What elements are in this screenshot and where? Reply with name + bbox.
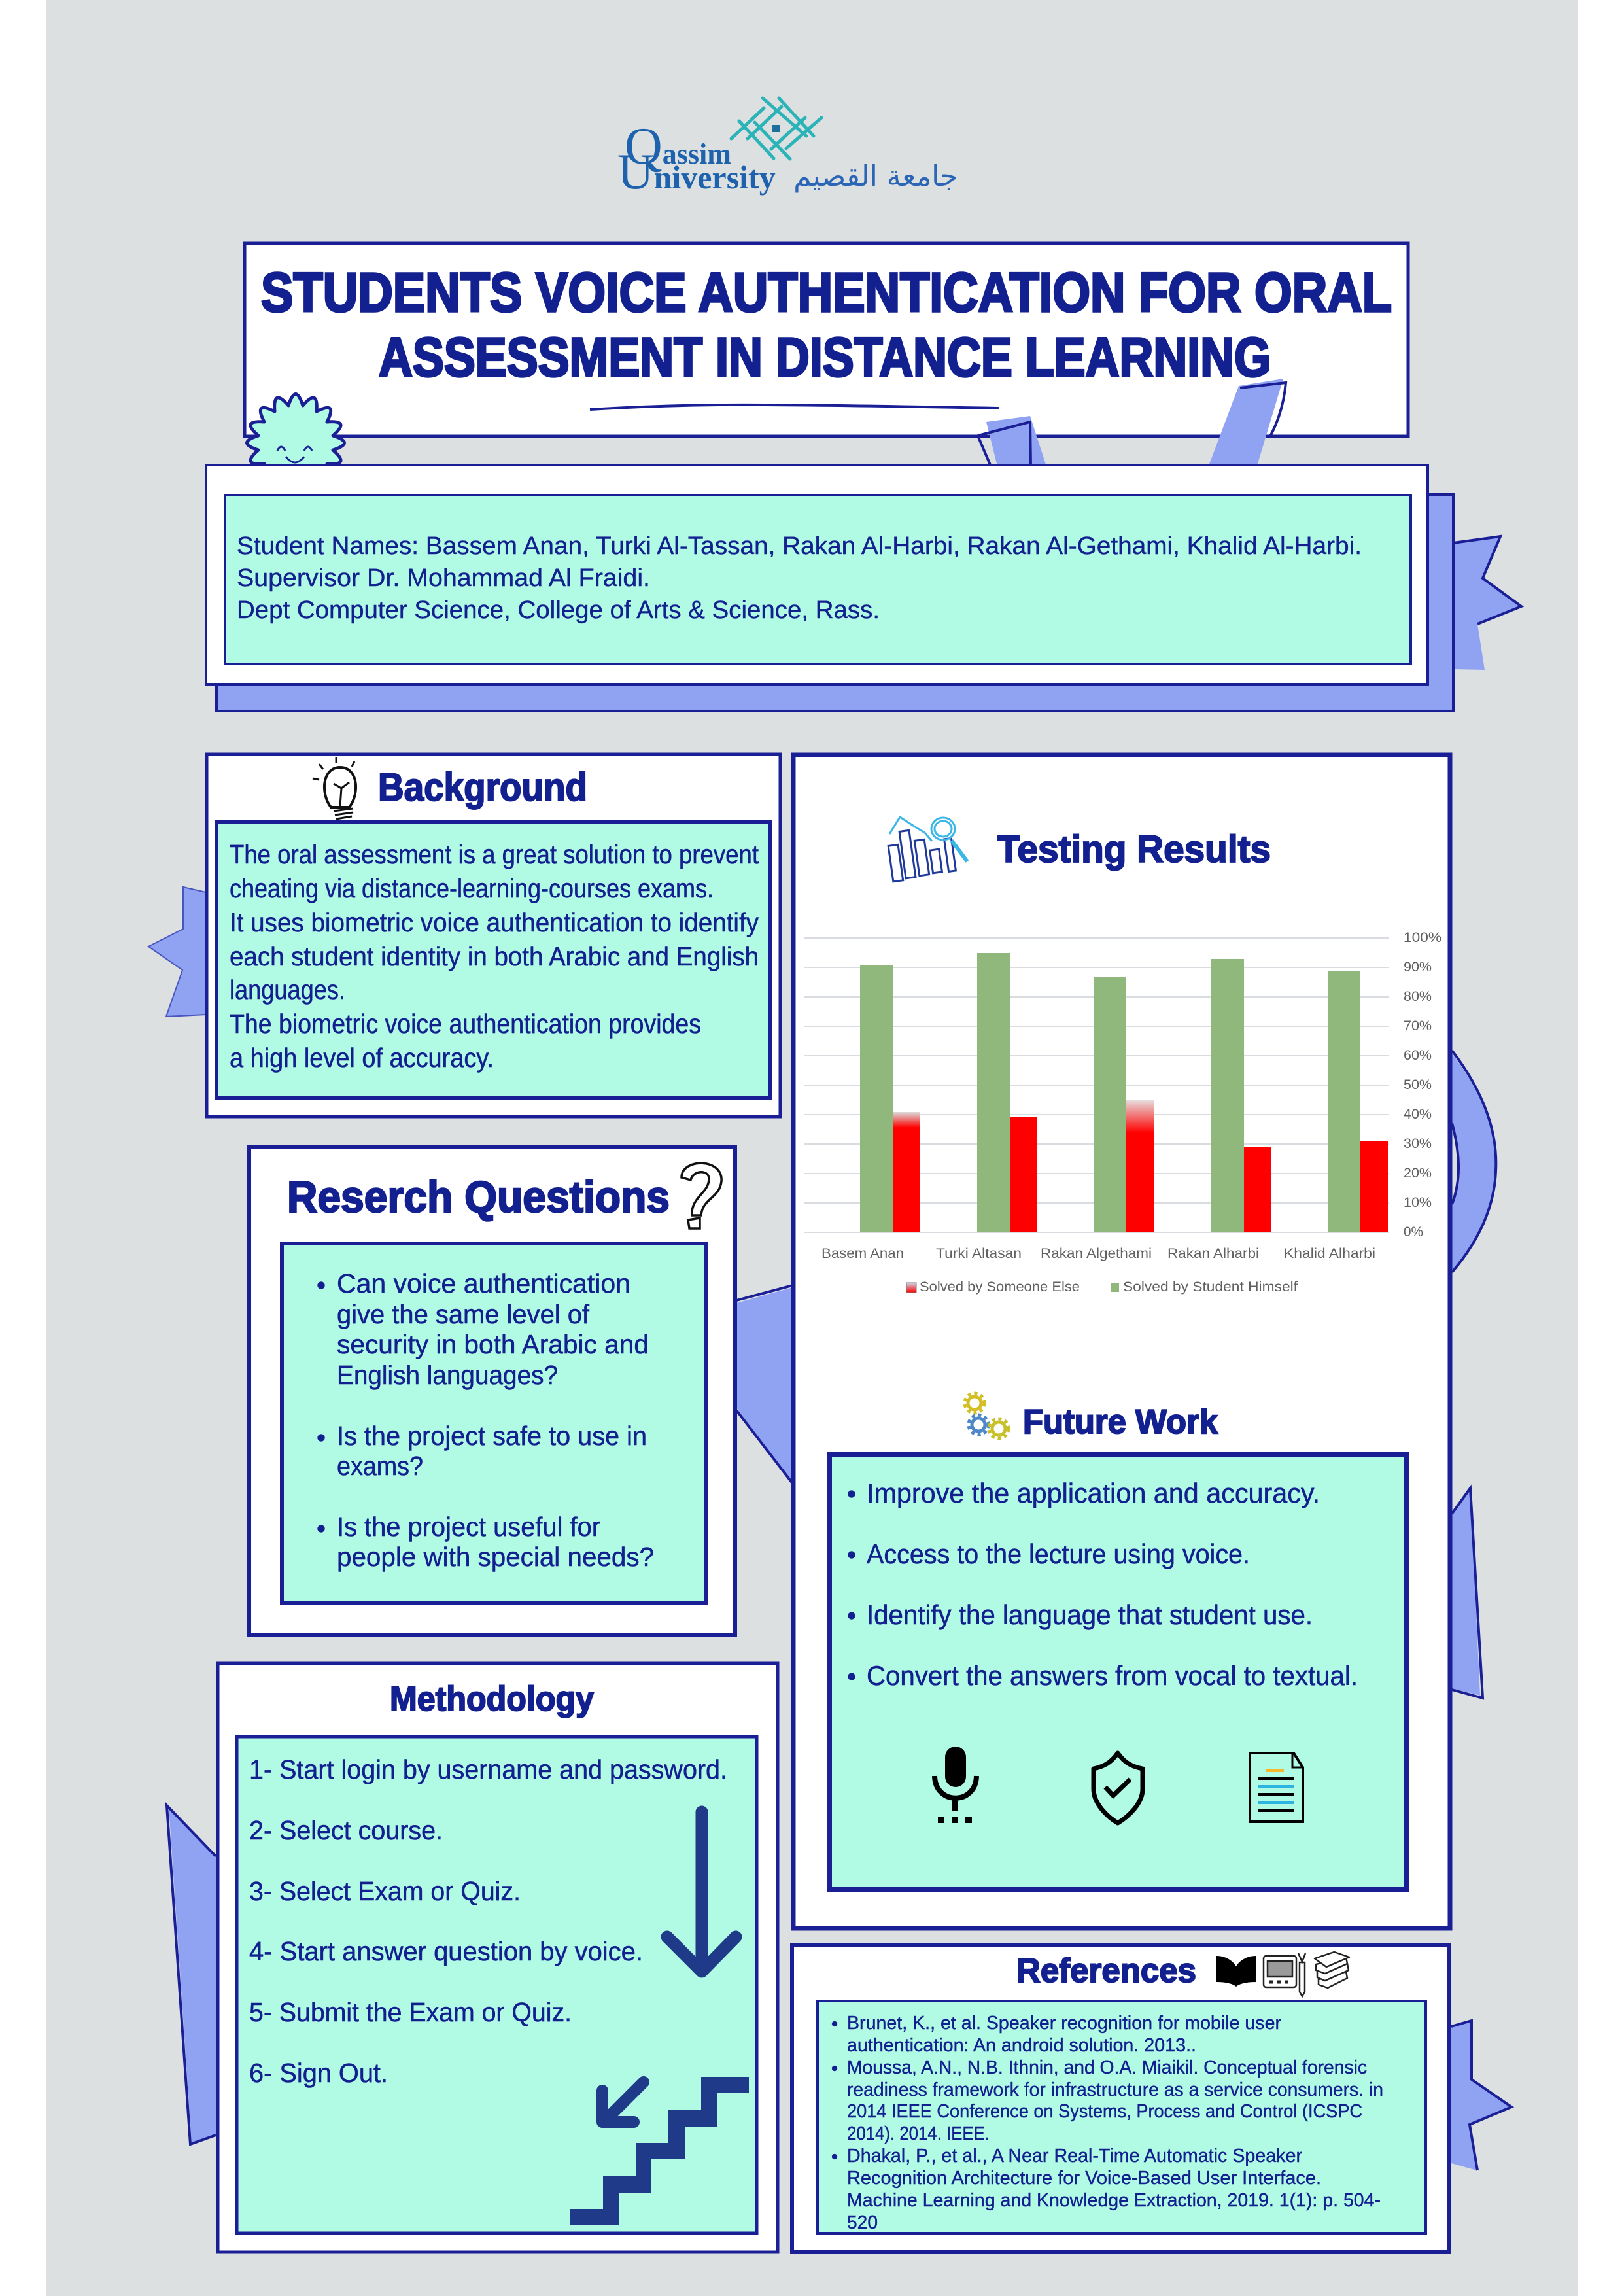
y axis labels: 0% bbox=[1404, 1225, 1423, 1240]
bar chart: solved by student vs someone else bbox=[804, 930, 1441, 1295]
ribbon: background star bbox=[148, 887, 206, 1017]
ribbon: references right star bbox=[1451, 2021, 1511, 2170]
y axis labels: 30% bbox=[1404, 1136, 1432, 1151]
x axis labels: Rakan Algethami bbox=[1041, 1246, 1152, 1261]
student names text: Supervisor Dr. Mohammad Al Fraidi. bbox=[237, 565, 650, 592]
logo wordmark bbox=[617, 118, 776, 200]
title text: STUDENTS VOICE AUTHENTICATION FOR ORAL bbox=[261, 262, 1392, 323]
green bars bbox=[860, 953, 1360, 1232]
references heading: References bbox=[1016, 1952, 1196, 1990]
student names text: Dept Computer Science, College of Arts & Science, Rass. bbox=[237, 597, 880, 624]
mascot: smiling sun bbox=[247, 394, 344, 481]
student names text: Student Names: Bassem Anan, Turki Al-Tassan, Rakan Al-Harbi, Rakan Al-Gethami, Khalid Al-Harbi. bbox=[237, 532, 1362, 560]
ribbon: title left bbox=[978, 416, 1046, 466]
references list: Moussa, A.N., N.B. Ithnin, and O.A. Miaikil. Conceptual forensic bbox=[847, 2057, 1367, 2078]
research questions list: Is the project safe to use in bbox=[337, 1421, 647, 1451]
references list: Machine Learning and Knowledge Extraction, 2019. 1(1): p. 504- bbox=[847, 2190, 1381, 2211]
chart legend bbox=[906, 1279, 1298, 1295]
background heading: Background bbox=[378, 765, 587, 809]
research questions list: Can voice authentication bbox=[337, 1268, 630, 1298]
y axis labels bbox=[1404, 930, 1441, 1240]
ribbon: names shadow bbox=[216, 495, 1521, 711]
future work list: Identify the language that student use. bbox=[867, 1599, 1313, 1630]
research questions list bbox=[318, 1268, 654, 1572]
icon: microphone bbox=[935, 1747, 976, 1820]
x axis labels: Basem Anan bbox=[821, 1246, 904, 1261]
icon: open book bbox=[1216, 1956, 1256, 1987]
title panel bbox=[245, 243, 1408, 436]
future work list bbox=[848, 1478, 1358, 1691]
icon: document bbox=[1250, 1753, 1303, 1822]
ribbon: results right arc bbox=[1451, 1051, 1496, 1272]
methodology steps: 1- Start login by username and password. bbox=[249, 1754, 727, 1784]
icon: gears bbox=[965, 1393, 1009, 1438]
background text: each student identity in both Arabic and English bbox=[230, 941, 759, 971]
research questions list: people with special needs? bbox=[337, 1542, 654, 1572]
icon: chart with magnifier bbox=[888, 817, 967, 882]
background text: The biometric voice authentication provides bbox=[230, 1009, 701, 1039]
methodology steps: 2- Select course. bbox=[249, 1815, 443, 1845]
research questions list: give the same level of bbox=[337, 1299, 590, 1329]
research questions heading: Reserch Questions bbox=[287, 1172, 670, 1222]
x axis labels: Turki Altasan bbox=[936, 1246, 1022, 1261]
icon: stairs bbox=[570, 2077, 749, 2225]
methodology steps: 6- Sign Out. bbox=[249, 2058, 388, 2088]
background text: The oral assessment is a great solution to prevent bbox=[230, 839, 759, 869]
research questions list: Is the project useful for bbox=[337, 1512, 600, 1542]
references list bbox=[832, 2013, 1383, 2233]
y axis labels: 10% bbox=[1404, 1195, 1432, 1210]
y axis labels: 40% bbox=[1404, 1107, 1432, 1122]
background text: cheating via distance-learning-courses exams. bbox=[230, 873, 714, 903]
logo wordmark: Qassim bbox=[625, 118, 731, 175]
panel: research questions bbox=[249, 1147, 735, 1635]
ribbon: between research questions and results bbox=[736, 1285, 793, 1484]
student names text bbox=[237, 532, 1362, 624]
x axis labels: Khalid Alharbi bbox=[1284, 1246, 1375, 1261]
icon: stacked books bbox=[1315, 1952, 1349, 1988]
chart legend: Solved by Someone Else bbox=[920, 1279, 1080, 1295]
methodology steps bbox=[249, 1754, 727, 2088]
references list: authentication: An android solution. 2013.. bbox=[847, 2035, 1196, 2056]
references list: 2014 IEEE Conference on Systems, Process and Control (ICSPC bbox=[847, 2101, 1362, 2122]
references list: Brunet, K., et al. Speaker recognition for mobile user bbox=[847, 2013, 1281, 2034]
ribbon: title right bbox=[1209, 379, 1286, 466]
red bars bbox=[893, 1100, 1388, 1232]
references list: readiness framework for infrastructure as a service consumers. in bbox=[847, 2079, 1383, 2100]
logo: Qassim University bbox=[617, 98, 958, 200]
research questions list: English languages? bbox=[337, 1360, 558, 1390]
arrow: down bbox=[667, 1812, 736, 1972]
research questions list: exams? bbox=[337, 1451, 423, 1481]
background text: languages. bbox=[230, 975, 345, 1005]
future work list: Access to the lecture using voice. bbox=[867, 1539, 1250, 1569]
icon: question mark bbox=[682, 1163, 721, 1228]
panel: testing results and future work bbox=[793, 755, 1450, 1928]
y axis labels: 90% bbox=[1404, 960, 1432, 975]
y axis labels: 20% bbox=[1404, 1166, 1432, 1181]
testing results heading: Testing Results bbox=[997, 828, 1271, 871]
ribbon: future work right tab bbox=[1452, 1488, 1483, 1698]
panel: student names bbox=[206, 465, 1428, 684]
panel: background bbox=[207, 754, 780, 1117]
future work heading: Future Work bbox=[1023, 1403, 1218, 1441]
y axis labels: 100% bbox=[1404, 930, 1441, 945]
methodology steps: 3- Select Exam or Quiz. bbox=[249, 1876, 521, 1906]
references list: 520 bbox=[847, 2212, 878, 2233]
logo arabic name: جامعة القصيم bbox=[793, 160, 958, 193]
panel: references bbox=[792, 1945, 1449, 2252]
title underline bbox=[590, 405, 999, 409]
y axis labels: 70% bbox=[1404, 1018, 1432, 1034]
y axis labels: 50% bbox=[1404, 1077, 1432, 1092]
y axis labels: 60% bbox=[1404, 1048, 1432, 1063]
references list: 2014). 2014. IEEE. bbox=[847, 2123, 990, 2144]
future work list: Improve the application and accuracy. bbox=[867, 1478, 1320, 1508]
background text bbox=[230, 839, 759, 1073]
y axis labels: 80% bbox=[1404, 989, 1432, 1004]
chart legend: Solved by Student Himself bbox=[1123, 1279, 1298, 1295]
research questions list: security in both Arabic and bbox=[337, 1329, 649, 1359]
x axis labels bbox=[821, 1246, 1375, 1261]
title text bbox=[261, 262, 1392, 388]
arrow: stairs direction bbox=[602, 2082, 644, 2122]
future work list: Convert the answers from vocal to textual. bbox=[867, 1660, 1358, 1691]
logo emblem bbox=[731, 98, 821, 159]
icon: light bulb bbox=[313, 757, 356, 819]
methodology steps: 4- Start answer question by voice. bbox=[249, 1936, 643, 1966]
references list: Dhakal, P., et al., A Near Real-Time Automatic Speaker bbox=[847, 2146, 1302, 2166]
icon: radio device bbox=[1264, 1953, 1305, 1996]
background text: a high level of accuracy. bbox=[230, 1043, 494, 1073]
background text: It uses biometric voice authentication to identify bbox=[230, 907, 759, 937]
ribbon: methodology left tab bbox=[167, 1805, 216, 2144]
panel: methodology bbox=[218, 1663, 778, 2252]
x axis labels: Rakan Alharbi bbox=[1167, 1246, 1259, 1261]
logo wordmark: University bbox=[617, 143, 776, 200]
icon: shield with check bbox=[1094, 1753, 1143, 1823]
title text: ASSESSMENT IN DISTANCE LEARNING bbox=[379, 326, 1271, 388]
methodology steps: 5- Submit the Exam or Quiz. bbox=[249, 1997, 572, 2027]
methodology heading: Methodology bbox=[390, 1680, 594, 1718]
references list: Recognition Architecture for Voice-Based User Interface. bbox=[847, 2168, 1321, 2189]
